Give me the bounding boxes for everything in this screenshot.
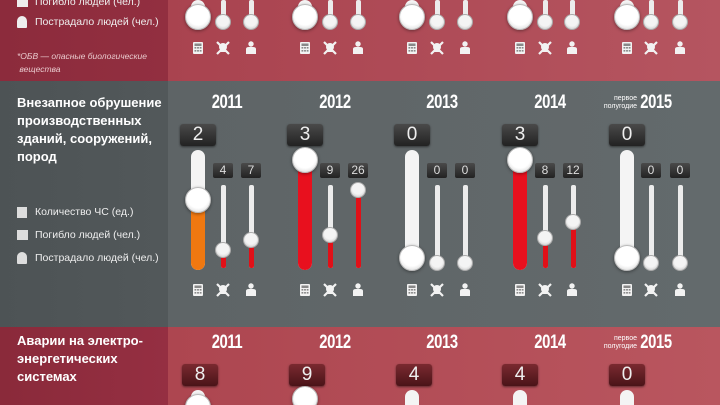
year labels bottom: 2015 (640, 332, 672, 353)
bottom section: badges and bar tops: 8 (195, 364, 205, 385)
chart: 2014: 12 (566, 163, 580, 177)
year labels bottom (212, 332, 672, 353)
year labels bottom: 2013 (426, 332, 458, 353)
chart: 2013 (393, 124, 475, 274)
chart: 2012: 26 (351, 163, 365, 177)
legend item: count: Количество ЧС (ед.) (35, 206, 133, 218)
year labels gray: первое (614, 95, 637, 102)
icons 2012 (300, 41, 363, 54)
year labels gray: 2014 (534, 92, 566, 113)
icons 2011 (193, 41, 256, 54)
legend item: injured: Пострадало людей (чел.) (35, 252, 159, 264)
chart: 2011: 7 (248, 163, 254, 177)
heading: power system accidents: Аварии на электро-энергетических системах (17, 333, 143, 384)
year labels bottom: первое (614, 335, 637, 342)
chart: 2014: 8 (542, 163, 548, 177)
year labels gray (212, 92, 672, 113)
icons 2013 (407, 41, 470, 54)
legend item: deaths: Погибло людей (чел.) (35, 229, 140, 241)
year labels gray: полугодие (604, 103, 637, 110)
icons 2015 (622, 41, 685, 54)
chart: 2015: 0 (648, 163, 654, 177)
chart: 2012: 9 (327, 163, 333, 177)
chart: 2012 (286, 124, 368, 270)
legend: injured: Пострадало людей (чел.) (35, 16, 159, 28)
top section: icon row (193, 41, 685, 55)
bottom section: badges and bar tops: 4 (515, 364, 525, 385)
chart: 2012: 3 (300, 124, 310, 145)
footnote: вещества (19, 64, 61, 74)
band: gray section (0, 81, 720, 327)
chart: 2011 (179, 124, 261, 270)
chart: 2011: 4 (220, 163, 226, 177)
chart: 2013: 0 (407, 124, 417, 145)
bottom section: badges and bar tops: 9 (302, 364, 312, 385)
icons 2014 (515, 41, 577, 54)
gray section: icon row (193, 283, 685, 297)
year labels bottom: 2011 (212, 332, 242, 353)
year labels gray: 2011 (212, 92, 242, 113)
year labels gray: 2012 (319, 92, 351, 113)
year labels gray: 2013 (426, 92, 458, 113)
chart: 2013: 0 (434, 163, 440, 177)
year labels gray: 2015 (640, 92, 672, 113)
chart: 2013: 0 (462, 163, 468, 177)
footnote: *ОБВ — опасные биологические (17, 51, 147, 61)
band: top red section (0, 0, 720, 81)
band: bottom red section (0, 327, 720, 405)
heading: building collapse: Внезапное обрушение производственных зданий, сооружений, пород (17, 95, 162, 164)
chart: 2015: 0 (677, 163, 683, 177)
top section: bar ends (184, 0, 688, 33)
footnote (17, 51, 147, 74)
chart: 2011: 2 (193, 124, 203, 145)
chart: 2014: 3 (515, 124, 525, 145)
bottom section: badges and bar tops (180, 364, 646, 405)
bottom section: badges and bar tops: 4 (409, 364, 419, 385)
year labels bottom: 2014 (534, 332, 566, 353)
year labels bottom: полугодие (604, 343, 637, 350)
bottom section: badges and bar tops: 0 (622, 364, 632, 385)
year labels bottom: 2012 (319, 332, 351, 353)
chart: 2015 (608, 124, 690, 274)
legend: gray section (17, 206, 159, 264)
chart: 2014 (501, 124, 583, 270)
chart: 2015: 0 (622, 124, 632, 145)
